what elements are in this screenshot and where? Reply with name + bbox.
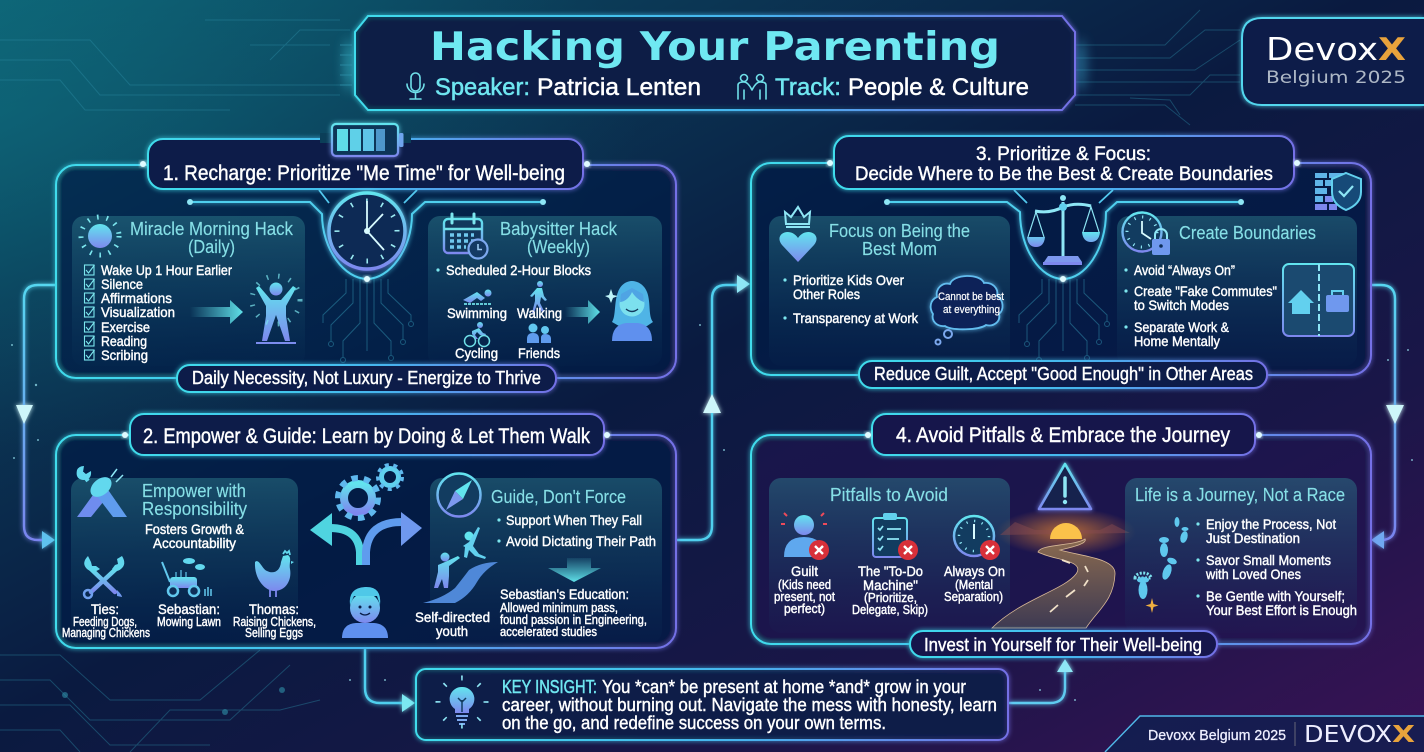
bullets: Avoid “Always On”	[1134, 262, 1235, 278]
heading: (Weekly)	[527, 237, 590, 257]
subpanel: babysitter hack	[428, 214, 662, 366]
bullets	[783, 272, 919, 326]
subpanel: create boundaries	[1117, 212, 1357, 366]
subpanel: empower with responsibility	[62, 466, 316, 643]
item: ties: Ties:	[91, 601, 119, 617]
item: guilt: Guilt	[791, 563, 818, 579]
icon: footprints	[1135, 517, 1189, 613]
item: guilt: perfect)	[784, 602, 825, 616]
item: guilt: present, not	[774, 590, 835, 604]
item: sebastian: Mowing Lawn	[157, 615, 221, 629]
activity: cycling	[455, 322, 498, 361]
panel 3: prioritize and focus	[416, 136, 1424, 752]
text: key insight: on the go, and redefine success on your own terms.	[502, 713, 886, 733]
callout: key insight	[416, 669, 1008, 740]
text: sebastian's education: found passion in Engineering,	[500, 613, 647, 627]
checklist: Exercise	[101, 319, 150, 335]
title: Hacking Your Parenting	[430, 25, 1000, 70]
icon: smiling woman	[605, 281, 653, 341]
bullets: Just Destination	[1206, 530, 1300, 546]
bullets: Separate Work &	[1134, 319, 1230, 335]
bullets: Be Gentle with Yourself;	[1206, 588, 1345, 604]
heading: Responsibility	[142, 499, 247, 519]
bullets: Your Best Effort is Enough	[1206, 602, 1357, 618]
text: key insight: career, without burning out. Navigate the mess with honesty, learn	[502, 695, 997, 715]
text: key insight: KEY INSIGHT:	[502, 677, 597, 697]
checklist: Visualization	[101, 304, 175, 320]
bullet: scheduled blocks: Scheduled 2-Hour Blocks	[446, 262, 591, 278]
heading: 1. recharge: 1. Recharge: Prioritize "Me Time" for Well-being	[163, 162, 565, 185]
heading: Focus on Being the	[829, 221, 970, 241]
item: always on	[944, 516, 1005, 604]
heading: Best Mom	[862, 239, 937, 259]
icon: light bulb	[437, 677, 487, 727]
heading	[142, 481, 247, 519]
panel 4: avoid pitfalls	[751, 435, 1371, 644]
heading: Babysitter Hack	[500, 219, 618, 239]
icon: balance scales	[884, 190, 1244, 362]
activity: walking: Walking	[517, 305, 562, 321]
text: sebastian's education: Sebastian's Education:	[500, 586, 629, 602]
icon: energized person	[252, 276, 300, 343]
bullets: Prioritize Kids Over	[793, 272, 904, 288]
heading: 4. avoid pitfalls	[865, 414, 1262, 455]
callout: thought cloud	[931, 276, 1004, 344]
text: sebastian's education: Allowed minimum pass,	[500, 601, 618, 615]
heading: Pitfalls to Avoid	[830, 485, 948, 505]
heading: 3. prioritize and focus: Decide Where to Be the Best & Create Boundaries	[855, 164, 1273, 185]
heading: 3. prioritize and focus	[827, 136, 1300, 189]
text: fosters growth: Accountability	[153, 535, 236, 551]
track: People & Culture	[848, 74, 1029, 101]
item: ties: Managing Chickens	[62, 626, 150, 640]
header panel	[355, 16, 1075, 110]
icon: handshake and wrench	[77, 466, 127, 517]
text: sebastian's education: accelerated studies	[500, 625, 597, 639]
activity: cycling: Cycling	[455, 345, 498, 361]
item: sebastian	[157, 558, 221, 629]
icon: calendar	[444, 214, 488, 258]
item: to-do machine: The "To-Do	[858, 563, 923, 579]
text: fosters growth: Fosters Growth &	[145, 521, 245, 537]
icon: brick wall and shield	[1315, 173, 1361, 210]
bullets: Enjoy the Process, Not	[1206, 516, 1336, 532]
text: self-directed youth: youth	[436, 623, 468, 639]
bullets: Avoid Dictating Their Path	[506, 533, 656, 549]
item: sebastian: Sebastian:	[158, 601, 220, 617]
heading: Miracle Morning Hack	[130, 219, 294, 239]
item: ties: Feeding Dogs,	[73, 615, 137, 629]
bullets: Savor Small Moments	[1206, 552, 1331, 568]
text: key insight: You *can* be present at home *and* grow in your	[602, 677, 966, 697]
checklist: Reading	[101, 333, 147, 349]
activity: swimming	[447, 290, 507, 321]
badge: Devoxx Belgium 2025	[1242, 18, 1424, 105]
heading: Create Boundaries	[1179, 223, 1316, 243]
icon: crown and heart	[779, 207, 817, 262]
connectors between panels	[16, 275, 1404, 712]
icon: battery	[320, 124, 411, 156]
callout: thought cloud: at everything	[943, 304, 1000, 316]
bullets: Other Roles	[793, 286, 860, 302]
heading: Life is a Journey, Not a Race	[1135, 485, 1345, 505]
item: ties	[62, 556, 150, 640]
footer badge: DEVOX	[1304, 722, 1392, 748]
bullets	[1196, 516, 1357, 618]
item: guilt	[774, 513, 835, 616]
item: to-do machine: (Prioritize,	[864, 591, 917, 605]
pill: reduce guilt: Reduce Guilt, Accept "Good Enough" in Other Areas	[874, 364, 1253, 384]
heading: Guide, Don't Force	[491, 487, 626, 507]
footer badge: Devoxx Belgium 2025	[1148, 727, 1286, 744]
icon: warning triangle	[1039, 464, 1091, 509]
icon: compass	[438, 474, 480, 516]
item: to-do machine: Machine"	[863, 577, 918, 593]
item: guilt: (Kids need	[778, 578, 831, 592]
text: fosters growth	[145, 521, 245, 551]
pill: invest in yourself: Invest in Yourself for Their Well-being	[924, 635, 1202, 655]
checklist: Affirmations	[101, 290, 172, 306]
icon: home and work door	[1283, 264, 1354, 336]
heading	[829, 221, 970, 259]
footer badge: X	[1392, 722, 1415, 748]
item: to-do machine: Delegate, Skip)	[852, 603, 928, 617]
item: thomas: Selling Eggs	[245, 626, 303, 640]
heading: 4. avoid pitfalls: 4. Avoid Pitfalls & Embrace the Journey	[896, 424, 1230, 447]
item: always on: (Mental	[955, 578, 993, 592]
icon: self-directed youth climbing	[423, 527, 498, 603]
speaker: Speaker:	[435, 74, 530, 101]
text: key insight	[502, 677, 997, 733]
badge: Devoxx Belgium 2025: X	[1378, 32, 1406, 68]
track: Track:	[775, 74, 841, 101]
text: sebastian's education	[500, 586, 647, 639]
item: thomas: Thomas:	[249, 601, 299, 617]
item: always on: Separation)	[944, 590, 1003, 604]
subpanel: life is a journey	[1125, 478, 1357, 633]
pill: daily necessity: Daily Necessity, Not Luxury - Energize to Thrive	[192, 368, 541, 388]
subpanel: miracle morning hack	[72, 216, 305, 366]
checklist	[84, 262, 232, 363]
icon: gears, arrows and boy	[310, 465, 422, 638]
badge: Devoxx Belgium 2025: Belgium 2025	[1266, 68, 1406, 88]
speaker	[435, 74, 701, 101]
heading	[500, 219, 618, 257]
arrow	[190, 300, 243, 324]
callout: thought cloud: Cannot be best	[938, 291, 1004, 303]
arrow	[565, 300, 600, 324]
panel 2: empower and guide	[56, 435, 676, 648]
bullets	[497, 512, 656, 549]
badge: Devoxx Belgium 2025: Devox	[1266, 32, 1378, 68]
checklist: Silence	[101, 276, 143, 292]
subpanel: focus on being the best mom	[769, 207, 1010, 366]
speaker: Patricia Lenten	[537, 74, 701, 101]
item: to-do machine	[852, 513, 928, 617]
heading: 3. prioritize and focus: 3. Prioritize & Focus:	[976, 144, 1151, 165]
bullets: with Loved Ones	[1205, 566, 1301, 582]
item: always on: Always On	[944, 563, 1005, 579]
pill: daily necessity	[177, 365, 556, 392]
heading: Empower with	[142, 481, 246, 501]
activity: walking	[517, 281, 562, 321]
text: self-directed youth: Self-directed	[415, 609, 490, 625]
heading: (Daily)	[188, 237, 235, 257]
subpanel: guide, don't force	[415, 474, 662, 643]
illustration: sunset road	[992, 508, 1136, 628]
bullets: Transparency at Work	[793, 310, 919, 326]
bullets	[1124, 262, 1277, 349]
icon: clock	[187, 190, 546, 362]
icon: clock with lock	[1122, 212, 1170, 255]
checklist: Wake Up 1 Hour Earlier	[101, 262, 232, 278]
heading: 2. empower and guide	[122, 414, 610, 455]
item: thomas: Raising Chickens,	[233, 615, 316, 629]
pill: reduce guilt	[859, 361, 1267, 388]
activity: friends: Friends	[518, 345, 560, 361]
icon: sun	[81, 217, 119, 255]
heading	[130, 219, 294, 257]
icon: people holding hands	[738, 74, 766, 99]
heading: 1. recharge	[140, 139, 590, 189]
bullets: Home Mentally	[1134, 333, 1220, 349]
activity: swimming: Swimming	[447, 305, 507, 321]
activity: friends	[518, 324, 560, 361]
icon: microphone	[407, 73, 424, 99]
bullets: Create "Fake Commutes"	[1134, 283, 1277, 299]
bullets: Support When They Fall	[506, 512, 642, 528]
item: thomas	[233, 551, 316, 640]
text: self-directed youth	[415, 609, 490, 639]
heading: 2. empower and guide: 2. Empower & Guide: Learn by Doing & Let Them Walk	[143, 425, 590, 448]
subpanel: pitfalls to avoid	[769, 478, 1010, 633]
arrow: down	[548, 558, 601, 582]
checklist: Scribing	[101, 347, 148, 363]
footer badge	[1105, 716, 1424, 752]
bullets: to Switch Modes	[1134, 297, 1229, 313]
